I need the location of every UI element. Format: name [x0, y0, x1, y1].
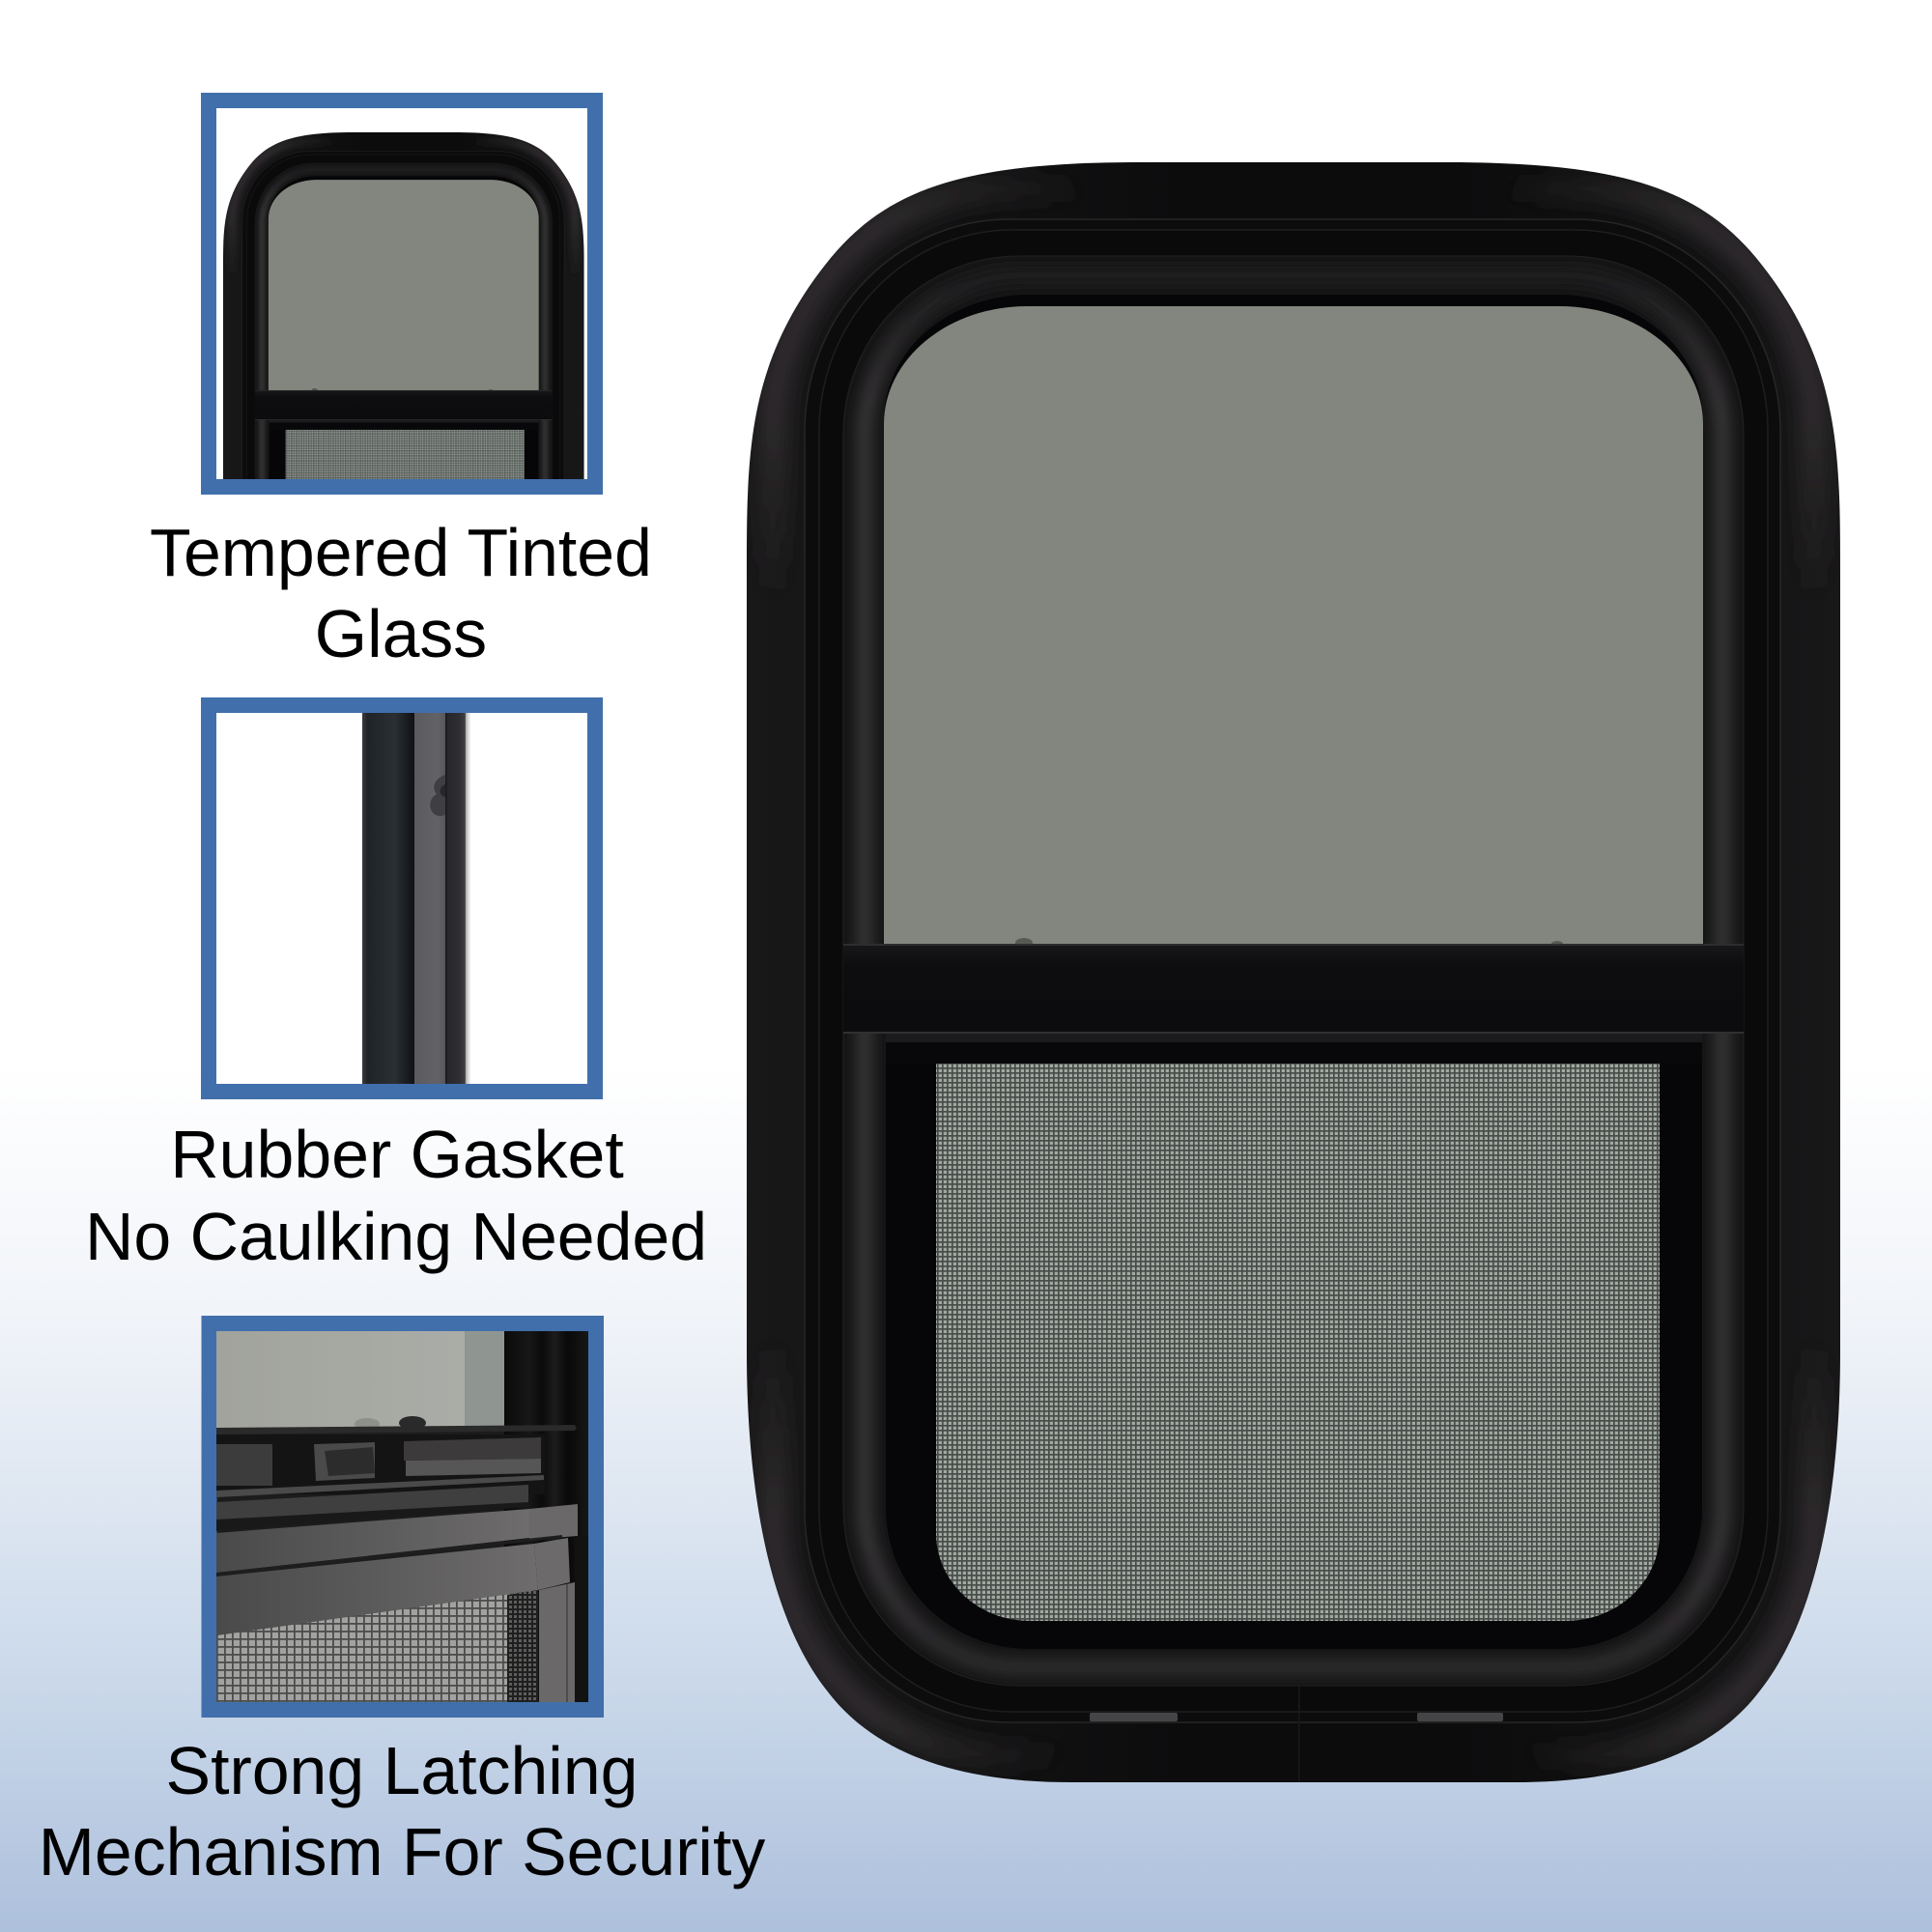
- panel: latching mechanism: [209, 1323, 596, 1710]
- glass area: [216, 1331, 588, 1702]
- panel frame 1: [209, 100, 595, 487]
- insect screen mesh: [936, 1064, 1660, 1621]
- gasket profile photo: [362, 713, 470, 1084]
- window outer rubber rim: [747, 162, 1840, 1782]
- window detail crop: [223, 132, 584, 479]
- latch housing: [216, 1425, 577, 1497]
- screen mesh close-up: [216, 1590, 538, 1702]
- heading: latching mechanism: Mechanism For Security: [39, 1814, 765, 1889]
- bottom frame tabs and seam: [1090, 1686, 1503, 1782]
- heading: latching mechanism: Strong Latching: [166, 1733, 638, 1808]
- latch detail photo: [216, 1331, 588, 1702]
- heading: rubber gasket: Rubber Gasket: [170, 1117, 624, 1192]
- panel frame 3: [209, 1323, 596, 1710]
- panel frame 2: [209, 705, 595, 1092]
- heading: tempered tinted glass: [150, 515, 652, 671]
- inner tube frame: [843, 256, 1744, 1686]
- vertical screen frame: [539, 1536, 577, 1702]
- panel: rubber gasket: [209, 705, 595, 1092]
- main product image: sliding window: [747, 162, 1840, 1782]
- weather strip and fuzz: [216, 1485, 528, 1531]
- screen frame bars: [216, 1504, 578, 1635]
- panel: tempered tinted glass: [201, 93, 603, 495]
- heading: latching mechanism: [39, 1733, 765, 1889]
- heading: tempered tinted glass: Tempered Tinted: [150, 515, 652, 590]
- stepped frame channels: [805, 219, 1780, 1722]
- heading: tempered tinted glass: Glass: [315, 596, 487, 671]
- meeting rail bar: [843, 944, 1744, 1064]
- tinted glass pane: [884, 306, 1703, 948]
- heading: rubber gasket: No Caulking Needed: [85, 1199, 707, 1274]
- heading: rubber gasket: [85, 1117, 707, 1274]
